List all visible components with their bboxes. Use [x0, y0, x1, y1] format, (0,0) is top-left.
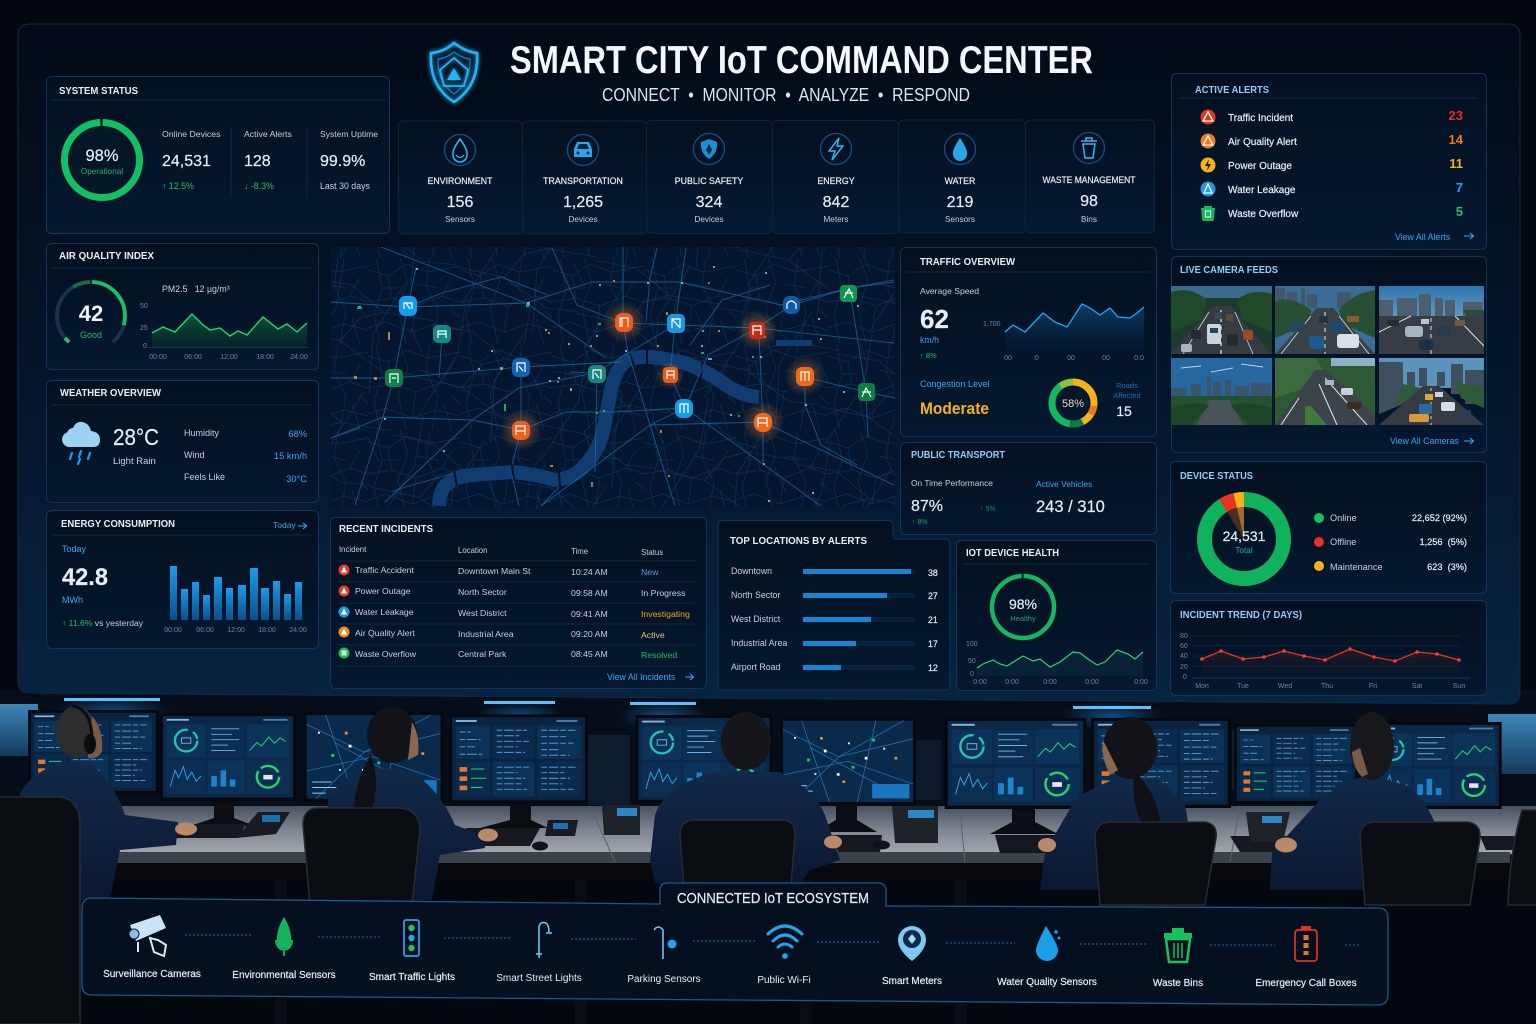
row: air quality alert [338, 626, 665, 640]
stat: online devices: 24,531 [162, 153, 211, 170]
chart: incident trend line: Sun [1453, 683, 1465, 690]
icon: emergency call box: Emergency Call Boxes [1255, 978, 1357, 989]
panel: public transport: ↑ 5% [980, 506, 996, 513]
panel: air quality index: AIR QUALITY INDEX [59, 250, 154, 262]
panel: weather overview: Wind [184, 450, 205, 460]
panel: live camera feeds [1171, 256, 1486, 452]
chart: average speed line [983, 304, 1144, 362]
tile: environment [398, 121, 522, 234]
row: power outage: Power Outage [355, 586, 411, 596]
alert: traffic incident: 23 [1449, 108, 1463, 123]
panel: traffic overview: Congestion Level [920, 379, 990, 389]
panel: recent incidents: Status [641, 548, 663, 557]
panel: traffic overview: Affected [1113, 391, 1141, 400]
icon: waste bin [1153, 928, 1203, 989]
tile: water: 219 [947, 194, 973, 211]
bar: industrial area: Industrial Area [731, 638, 787, 648]
stat: system uptime: Last 30 days [320, 181, 370, 191]
chart: average speed line: 00 [1067, 355, 1075, 362]
panel: public transport: 87% [911, 498, 943, 515]
chairs [0, 797, 1536, 1024]
monitor 8 [1091, 718, 1231, 808]
tile: energy: ENERGY [817, 176, 855, 186]
row: water leakage [338, 606, 690, 619]
chart: incident trend line: Fri [1369, 683, 1378, 690]
row: waste overflow: Resolved [641, 650, 677, 660]
panel: active alerts: ACTIVE ALERTS [1195, 84, 1269, 96]
tile: public safety: Devices [694, 215, 724, 224]
chart: energy bars: 12:00 [227, 627, 245, 634]
row: traffic accident: 10:24 AM [571, 567, 608, 577]
ring: operational 98%: 98% [85, 147, 119, 165]
tile: waste management: WASTE MANAGEMENT [1042, 175, 1136, 185]
operator 5 [1270, 712, 1452, 890]
row: power outage [338, 586, 686, 598]
panel: device status [1170, 462, 1486, 594]
panel: recent incidents: Location [458, 546, 487, 555]
chart: incident trend line: 60 [1180, 643, 1188, 650]
tile: environment: 156 [447, 194, 473, 211]
icon: surveillance camera: Surveillance Cameras [103, 969, 201, 980]
panel: traffic overview: 62 [920, 304, 949, 334]
ring: operational 98%: Operational [81, 167, 123, 176]
monitor 3 [304, 712, 444, 802]
alert: waste overflow: Waste Overflow [1228, 209, 1299, 220]
subtitle: CONNECT • MONITOR • ANALYZE • RESPOND [602, 85, 970, 105]
operator 3 [650, 712, 842, 884]
panel: incident trend: INCIDENT TREND (7 DAYS) [1180, 609, 1302, 621]
legend: offline [1314, 537, 1467, 547]
icon: smart traffic light [369, 920, 455, 983]
ring: healthy 98% [991, 575, 1055, 639]
icon: environmental sensor [232, 917, 336, 981]
panel: traffic overview: 15 [1116, 403, 1132, 419]
camera feed 6 [1379, 358, 1484, 425]
markers [385, 285, 875, 451]
alert: waste overflow: 5 [1456, 204, 1463, 219]
bar: north sector: North Sector [731, 590, 780, 600]
operator 2 [325, 707, 498, 900]
row: waste overflow [338, 648, 677, 660]
monitor 4 [449, 714, 588, 804]
camera feed 3 [1379, 286, 1484, 354]
chart: average speed line: 1,700 [983, 321, 1001, 328]
panel: traffic overview: ↑ 8% [920, 351, 937, 360]
chart: device health line: 0:00 [1085, 679, 1099, 686]
alert: water leakage: 7 [1456, 180, 1463, 195]
chart: incident trend line: Sat [1412, 683, 1422, 690]
panel: recent incidents [330, 518, 706, 688]
monitor stands [190, 795, 1058, 834]
tile: public safety: PUBLIC SAFETY [675, 176, 743, 186]
row: water leakage: West District [458, 608, 507, 618]
icon: environmental sensor: Environmental Sensors [232, 970, 336, 981]
alert: air quality: 14 [1449, 132, 1464, 147]
panel: recent incidents: View All Incidents [607, 672, 676, 682]
row: traffic accident: Traffic Accident [355, 565, 414, 575]
chart: PM2.5 line [140, 303, 308, 361]
chart: PM2.5 line: 00:00 [149, 354, 167, 361]
row: power outage: In Progress [641, 588, 686, 598]
stat: system uptime: System Uptime [320, 129, 378, 139]
camera feed 2 [1275, 286, 1375, 354]
stat: active alerts: 128 [244, 153, 271, 170]
bar: industrial area: 17 [928, 639, 938, 649]
panel: traffic overview: Average Speed [920, 286, 979, 296]
legend: maintenance: Maintenance [1330, 562, 1383, 572]
panel: active alerts [1172, 74, 1486, 250]
tile: water: WATER [945, 176, 975, 186]
panel: weather overview: Feels Like [184, 472, 225, 482]
monitor 7 [944, 718, 1086, 809]
tile: energy [772, 120, 898, 234]
legend: offline: 1,256 (5%) [1420, 537, 1467, 547]
legend: maintenance: 623 (3%) [1427, 562, 1467, 572]
row: traffic accident [338, 564, 659, 577]
chart: incident trend line: Thu [1321, 683, 1333, 690]
monitor 10 [1380, 722, 1502, 809]
panel: iot device health: IOT DEVICE HEALTH [966, 547, 1059, 559]
icon: parking sensor [627, 927, 701, 985]
chart: average speed line: 00 [1102, 355, 1110, 362]
bar: airport road [731, 662, 938, 673]
tile: public safety [646, 120, 772, 234]
alert: water leakage: Water Leakage [1228, 185, 1296, 196]
sensor dots [354, 266, 859, 502]
bar: industrial area [731, 638, 938, 649]
legend: maintenance [1314, 561, 1467, 572]
bar: west district: West District [731, 614, 781, 624]
tile: energy: 842 [823, 194, 849, 211]
bar: downtown [731, 566, 938, 578]
legend: online [1314, 513, 1467, 523]
panel: weather overview [46, 380, 318, 502]
operator 4 [1038, 717, 1195, 890]
panel: top locations by alerts: TOP LOCATIONS BY ALERTS [730, 535, 867, 547]
panel: system status [46, 76, 390, 234]
alert: waste overflow [1201, 204, 1463, 221]
tile: transportation: TRANSPORTATION [543, 176, 623, 186]
donut: device status total: Total [1235, 546, 1253, 555]
icon: public wi-fi: Public Wi-Fi [757, 975, 811, 986]
monitor 1 [28, 710, 159, 794]
chart: device health line: 0:00 [1005, 679, 1019, 686]
operator 1 [15, 706, 197, 900]
icon: water quality sensor: Water Quality Sensors [997, 977, 1097, 988]
chart: device health line: 50 [968, 658, 976, 665]
icon: waste bin: Waste Bins [1153, 978, 1203, 989]
panel: category tiles [398, 120, 1154, 234]
chart: device health line: 0:00 [1134, 679, 1148, 686]
alert: water leakage [1200, 180, 1463, 196]
panel: energy consumption: Today [62, 544, 87, 554]
monitors [28, 710, 1502, 834]
icon: surveillance camera [103, 915, 201, 980]
bar: west district [731, 614, 938, 625]
panel: energy consumption: Today [273, 520, 296, 530]
monitor 5 [636, 715, 772, 803]
camera feed 1 [1171, 286, 1272, 354]
chart: incident trend line: Mon [1195, 683, 1209, 690]
panel: connected IoT ecosystem [82, 883, 1388, 1005]
panel: energy consumption: 42.8 [62, 564, 108, 591]
stat: online devices [162, 129, 221, 191]
donut: device status total: 24,531 [1223, 528, 1266, 544]
desk equipment: keyboards and phones [150, 805, 1520, 853]
monitor 2 [160, 713, 296, 800]
tile: transportation: Devices [568, 215, 598, 224]
panel: live camera feeds: LIVE CAMERA FEEDS [1180, 264, 1278, 276]
alert: traffic incident: Traffic Incident [1228, 113, 1293, 124]
icon: water quality sensor [997, 926, 1097, 988]
panel: public transport: Active Vehicles [1036, 479, 1092, 489]
tile: water [898, 120, 1026, 233]
row: traffic accident: Downtown Main St [458, 566, 531, 576]
row: waste overflow: 08:45 AM [571, 649, 608, 659]
panel: air quality index: PM2.5 12 µg/m³ [162, 284, 230, 294]
chart: energy bars: 00:00 [164, 627, 182, 634]
panel: incident trend [1170, 600, 1486, 696]
panel: public transport: PUBLIC TRANSPORT [911, 449, 1006, 461]
chart: incident trend line [1180, 633, 1470, 690]
panel: live camera feeds: View All Cameras [1390, 436, 1459, 446]
icon: smart street light [496, 922, 582, 984]
bar: downtown: 38 [928, 568, 938, 578]
panel: recent incidents: RECENT INCIDENTS [339, 523, 433, 535]
tile: waste management [1026, 120, 1154, 233]
chart: average speed line: :0 [1033, 355, 1039, 362]
panel: public transport: 243 / 310 [1036, 498, 1105, 516]
panel: traffic overview: TRAFFIC OVERVIEW [920, 256, 1015, 268]
roads [331, 247, 895, 506]
arrow: view all alerts [1464, 233, 1474, 239]
row: traffic accident: New [641, 567, 659, 577]
chart: PM2.5 line: 0 [143, 343, 147, 350]
panel: traffic overview: Roads [1116, 381, 1138, 390]
stat: online devices: Online Devices [162, 129, 221, 139]
chart: PM2.5 line: 50 [140, 303, 148, 310]
panel: energy consumption: MWh [62, 595, 83, 605]
row: air quality alert: Air Quality Alert [355, 628, 415, 638]
chart: device health line: 0 [970, 671, 974, 678]
legend: online: Online [1330, 513, 1357, 523]
icon: smart street light: Smart Street Lights [496, 973, 582, 984]
arrow: view all cameras [1464, 438, 1474, 444]
panel: weather overview: 68% [288, 429, 307, 439]
bar: west district: 21 [928, 615, 938, 625]
chart: incident trend line: 0 [1183, 674, 1187, 681]
alert: air quality: Air Quality Alert [1228, 137, 1297, 148]
panel: top locations by alerts [718, 520, 950, 690]
bar: north sector [731, 590, 938, 601]
legend: online: 22,652 (92%) [1412, 513, 1467, 523]
chart: device health line: 0:00 [1043, 679, 1057, 686]
connectors [185, 935, 1360, 945]
panel: weather overview: Humidity [184, 428, 220, 438]
panel: system status: SYSTEM STATUS [59, 85, 138, 97]
control room rear wall and ceiling lights [0, 690, 1536, 815]
donut: device status total [1190, 485, 1298, 593]
ring: healthy 98%: 98% [1009, 596, 1037, 612]
row: waste overflow: Central Park [458, 649, 507, 659]
panel: traffic overview: Moderate [920, 399, 989, 418]
map: city IoT map [331, 247, 895, 508]
arrow: energy period [298, 523, 306, 529]
panel: air quality index [43, 244, 319, 370]
chart: average speed line: 00 [1004, 355, 1012, 362]
chart: device health line: 100 [966, 641, 978, 648]
row: power outage: 09:58 AM [571, 588, 608, 598]
panel: energy consumption: ENERGY CONSUMPTION [61, 518, 175, 530]
stat: active alerts [244, 129, 292, 191]
icon: parking sensor: Parking Sensors [627, 974, 701, 985]
river [439, 343, 812, 506]
gauge: AQI 42: Good [80, 330, 102, 340]
icon: smart meter pin: Smart Meters [882, 976, 942, 987]
panel: weather overview: WEATHER OVERVIEW [60, 387, 161, 399]
icon: emergency call box [1255, 926, 1357, 989]
bar: airport road: 12 [928, 663, 938, 673]
tile: waste management: 98 [1080, 193, 1098, 210]
panel: recent incidents: Incident [339, 545, 367, 554]
panel: weather overview: 30°C [286, 474, 307, 484]
row: waste overflow: Waste Overflow [355, 649, 417, 659]
row: air quality alert: 09:20 AM [571, 629, 608, 639]
bar: airport road: Airport Road [731, 662, 780, 672]
chart: PM2.5 line: 18:00 [256, 354, 274, 361]
panel: traffic overview [900, 248, 1156, 436]
chart: average speed line: 0:0 [1134, 355, 1144, 362]
alert: power outage: 11 [1449, 156, 1463, 171]
panel: device status: DEVICE STATUS [1180, 470, 1253, 482]
panel: recent incidents: Time [571, 547, 588, 556]
arrow: view all incidents [685, 674, 694, 680]
monitor 9 [1234, 724, 1358, 804]
chart: incident trend line: 20 [1180, 664, 1188, 671]
row: water leakage: Investigating [641, 609, 690, 619]
row: air quality alert: Active [641, 630, 665, 640]
tile: environment: ENVIRONMENT [427, 176, 493, 186]
panel: iot device health [956, 540, 1156, 690]
panel: public transport: On Time Performance [911, 478, 993, 488]
camera feed 4 [1171, 358, 1272, 425]
row: water leakage: 09:41 AM [571, 609, 608, 619]
icon: rain cloud [62, 422, 100, 464]
tile: transportation: 1,265 [563, 194, 603, 211]
panel: active alerts: View All Alerts [1395, 232, 1451, 242]
tile: water: Sensors [945, 215, 975, 224]
panel: weather overview: 28°C [113, 424, 159, 450]
chart: energy bars: 24:00 [289, 627, 307, 634]
icon: smart traffic light: Smart Traffic Lights [369, 972, 455, 983]
panel: connected IoT ecosystem: CONNECTED IoT ECOSYSTEM [677, 891, 869, 907]
donut: congestion 58% [1044, 374, 1102, 432]
chart: incident trend line: Wed [1278, 683, 1292, 690]
alert: power outage: Power Outage [1228, 161, 1292, 172]
main wall screen [18, 24, 1520, 704]
alert: power outage [1200, 156, 1463, 172]
camera feed 5 [1275, 358, 1375, 425]
chart: PM2.5 line: 06:00 [184, 354, 202, 361]
tile: transportation [522, 121, 646, 234]
row: water leakage: Water Leakage [355, 607, 414, 617]
chart: device health line [966, 641, 1148, 686]
chart: PM2.5 line: 12:00 [220, 354, 238, 361]
operator desk [115, 806, 1536, 1024]
icon: title shield [431, 43, 477, 102]
stat: online devices: ↑ 12.5% [162, 181, 194, 191]
chart: device health line: 0:00 [973, 679, 987, 686]
chart: PM2.5 line: 24:00 [290, 354, 308, 361]
gauge: AQI 42 [43, 268, 139, 364]
alert: air quality [1200, 132, 1464, 148]
chart: energy bars: 06:00 [196, 627, 214, 634]
tile: environment: Sensors [445, 215, 475, 224]
tile: public safety: 324 [696, 194, 722, 211]
bar: downtown: Downtown [731, 566, 772, 576]
panel: weather overview: Light Rain [113, 456, 156, 467]
row: air quality alert: Industrial Area [458, 629, 514, 639]
panel: energy consumption [46, 510, 318, 648]
legend: offline: Offline [1330, 537, 1356, 547]
panel: public transport: ↑ 8% [912, 519, 928, 526]
ring: operational 98% [64, 122, 140, 198]
row: power outage: North Sector [458, 587, 507, 597]
tile: energy: Meters [823, 215, 849, 224]
alert: traffic incident [1200, 108, 1463, 124]
chart: incident trend line: 40 [1180, 653, 1188, 660]
chart: energy bars: 18:00 [258, 627, 276, 634]
ring: healthy 98%: Healthy [1010, 614, 1036, 623]
chart: PM2.5 line: 25 [140, 325, 148, 332]
bar: north sector: 27 [928, 591, 938, 601]
panel: weather overview: 15 km/h [274, 451, 307, 461]
panel: energy consumption: ↑ 11.6% vs yesterday [62, 618, 144, 628]
stat: active alerts: Active Alerts [244, 129, 292, 139]
gauge: AQI 42: 42 [79, 301, 103, 326]
title: SMART CITY IoT COMMAND CENTER [510, 39, 1093, 82]
panel: traffic overview: km/h [920, 335, 939, 345]
tile: waste management: Bins [1081, 215, 1097, 224]
stat: active alerts: ↓ -8.3% [244, 181, 274, 191]
stat: system uptime: 99.9% [320, 153, 365, 170]
stat: system uptime [320, 129, 378, 191]
donut: congestion 58%: 58% [1062, 398, 1084, 410]
panel: public transport [900, 442, 1156, 534]
chart: energy bars [164, 566, 307, 634]
icon: smart meter pin [882, 926, 942, 987]
chart: incident trend line: 80 [1180, 633, 1188, 640]
icon: public wi-fi [757, 926, 811, 986]
chart: incident trend line: Tue [1237, 683, 1249, 690]
monitor 6 [780, 718, 916, 805]
